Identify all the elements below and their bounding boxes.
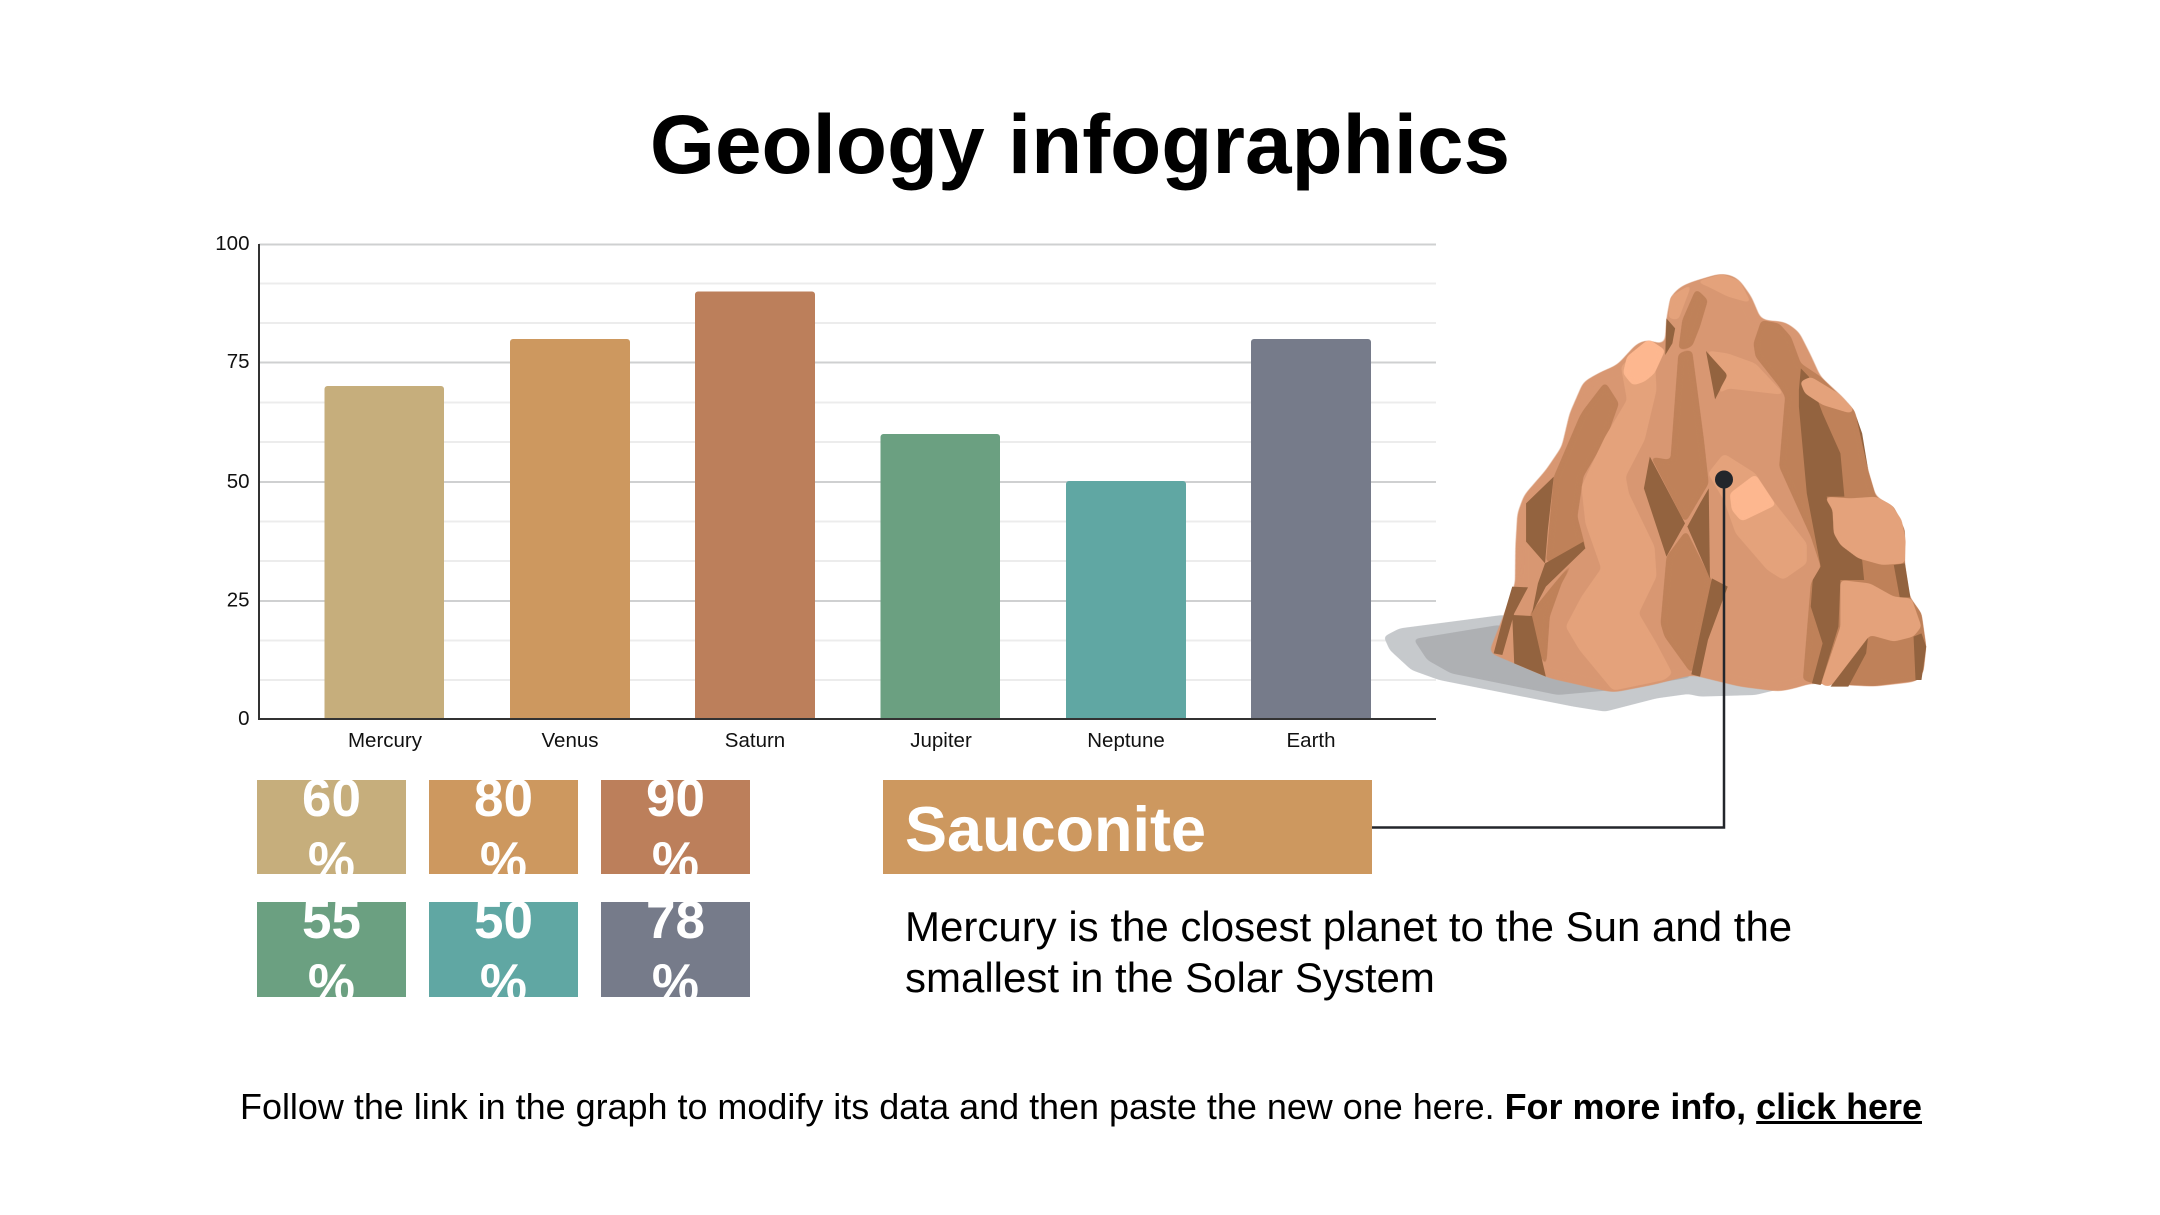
x axis labels [348, 729, 1336, 752]
rock shadow [1384, 615, 1811, 712]
heading: Sauconite: Sauconite [905, 795, 1206, 865]
footer note: Follow the link in the graph to modify its data and then paste the new one here. For more info, click here [240, 1086, 1922, 1127]
y axis labels: 25 [227, 588, 250, 612]
tile: 60% [257, 780, 406, 874]
y axis labels: 75 [227, 350, 250, 373]
description text: Mercury is the closest planet to the Sun and the [905, 903, 1792, 950]
x axis labels: Neptune [1087, 729, 1165, 752]
x axis labels: Saturn [725, 729, 785, 752]
tile: 80% [429, 780, 578, 874]
connector line with dot [1372, 470, 1733, 829]
description text: smallest in the Solar System [905, 954, 1435, 1001]
heading: Sauconite [883, 780, 1372, 874]
rock body [1489, 273, 1926, 693]
x axis labels: Jupiter [910, 729, 972, 752]
description text [905, 903, 1792, 1001]
tile: 55% [257, 902, 406, 997]
title: Geology infographics [650, 97, 1510, 191]
x axis labels: Venus [542, 729, 598, 752]
x axis labels: Mercury [348, 729, 423, 752]
tile: 90% [601, 780, 750, 874]
bars [324, 292, 1371, 719]
tile: 78% [601, 902, 750, 997]
y axis labels: 50 [227, 470, 250, 493]
y axis labels [215, 232, 250, 730]
y axis labels: 100 [215, 232, 250, 255]
tile: 50% [429, 902, 578, 997]
x axis labels: Earth [1286, 729, 1336, 752]
y axis labels: 0 [238, 707, 250, 730]
